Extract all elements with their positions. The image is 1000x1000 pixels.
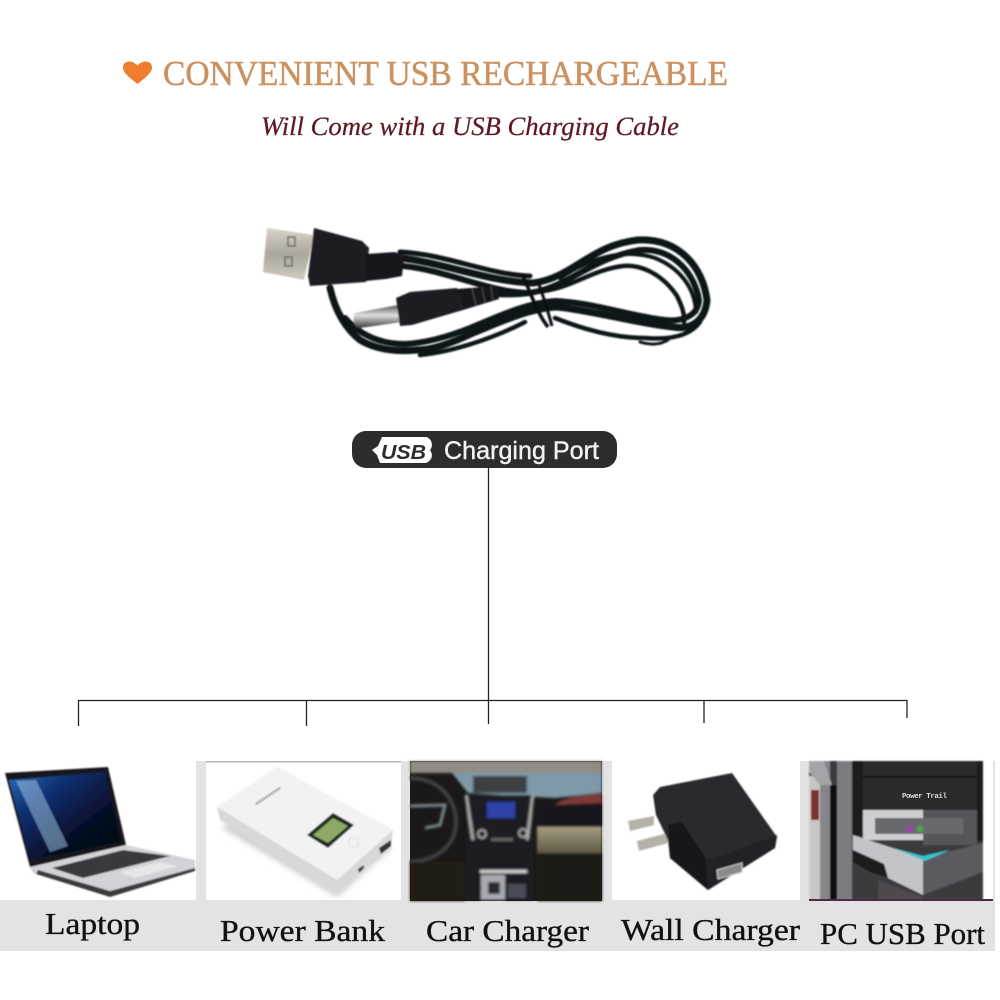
subtitle: Will Come with a USB Charging Cable xyxy=(261,112,679,141)
label: USB Charging Port xyxy=(352,431,617,468)
panel: wall charger xyxy=(612,761,800,900)
icon: USB logo: USB xyxy=(381,442,426,464)
photo: car interior xyxy=(410,761,602,901)
cable strands xyxy=(330,240,707,355)
label text: Charging Port xyxy=(444,437,599,465)
photo: USB wall charger xyxy=(628,773,777,890)
photo: PC tower xyxy=(809,761,983,900)
label: Wall Charger: Wall Charger xyxy=(621,912,801,947)
photo: laptop xyxy=(5,767,195,897)
icon: USB logo xyxy=(372,437,432,464)
cable tie xyxy=(522,274,548,327)
USB plug hood xyxy=(308,228,369,286)
barrel jack metal tip xyxy=(353,305,402,328)
USB metal plug xyxy=(263,228,314,280)
label: PC USB Port: PC USB Port xyxy=(820,916,985,951)
label: Car Charger: Car Charger xyxy=(426,913,590,948)
panel: PC USB port xyxy=(809,761,993,901)
panel: power bank xyxy=(206,761,401,900)
device strip background xyxy=(0,761,995,951)
title: CONVENIENT USB RECHARGEABLE xyxy=(163,54,728,93)
label: Laptop: Laptop xyxy=(45,906,140,941)
label: Power Bank: Power Bank xyxy=(220,913,386,948)
panel: car charger xyxy=(410,761,602,901)
photo: USB charging cable xyxy=(263,228,707,355)
icon: heart xyxy=(123,62,152,84)
panel: laptop xyxy=(0,761,196,900)
brand text: Power Trail xyxy=(902,793,947,801)
photo: power bank xyxy=(217,767,393,897)
barrel jack body xyxy=(396,288,463,326)
connector lines xyxy=(78,468,907,726)
